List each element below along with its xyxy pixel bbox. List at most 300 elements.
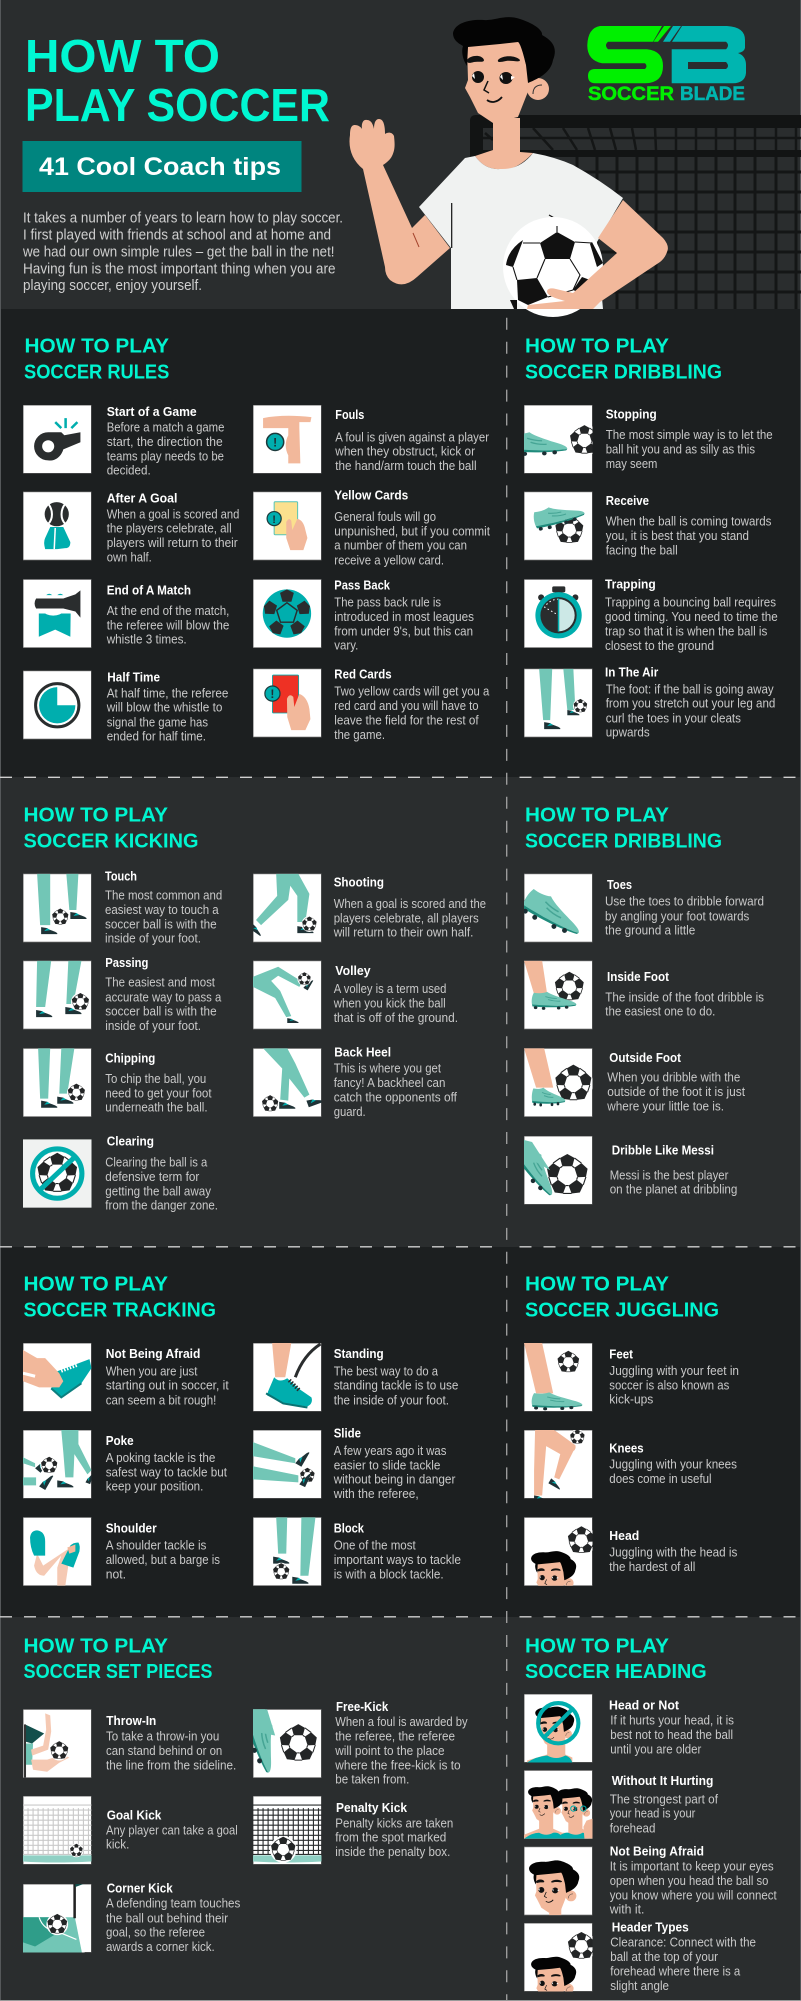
description	[606, 1070, 745, 1113]
description: whistle 3 times.	[106, 633, 187, 647]
title: Pass Back	[334, 578, 390, 592]
title: Header Types	[612, 1921, 689, 1935]
title: Inside Foot	[607, 970, 670, 984]
description: your head is your	[610, 1807, 695, 1821]
description: the hardest of all	[609, 1560, 695, 1574]
icon: volley legs	[253, 960, 322, 1030]
tip: free-kick	[238, 1700, 468, 1787]
tip: head or not	[524, 1694, 734, 1762]
title: Throw-In	[106, 1714, 156, 1728]
icon: goal net light	[23, 1796, 92, 1864]
intro text: playing soccer, enjoy yourself.	[23, 277, 202, 294]
description: inside of your foot.	[105, 932, 201, 946]
logo: soccer blade: SOCCER	[588, 84, 674, 105]
icon: boot and ball	[524, 405, 592, 474]
icon: ball and pennant	[23, 492, 92, 560]
description: is with a block tackle.	[334, 1568, 444, 1582]
intro text: It takes a number of years to learn how to play soccer.	[23, 210, 343, 227]
badge: 41 cool coach tips: 41 Cool Coach tips	[39, 153, 281, 181]
title: Poke	[106, 1434, 134, 1448]
description: The most common and	[105, 889, 222, 903]
icon: chipping legs	[23, 1048, 92, 1117]
description: A few years ago it was	[334, 1444, 446, 1458]
description	[106, 1539, 220, 1582]
icon: legs with small ball	[524, 668, 592, 738]
tip: yellow cards	[253, 488, 490, 567]
tip: block	[253, 1517, 461, 1586]
description: vary.	[334, 639, 358, 653]
icon: outside foot	[524, 1048, 592, 1117]
description: the players celebrate, all	[107, 522, 232, 536]
description: curl the toes in your cleats	[606, 711, 741, 725]
description: The easiest and most	[105, 976, 215, 990]
description: will point to the place	[334, 1744, 445, 1758]
description	[106, 1897, 240, 1954]
description: defensive term for	[105, 1170, 199, 1184]
description: goal, so the referee	[106, 1926, 205, 1940]
intro text	[22, 210, 343, 294]
description: trap so that it is when the ball is	[605, 624, 767, 638]
description: outside of the foot it is just	[607, 1085, 745, 1099]
description: until you are older	[610, 1742, 701, 1756]
tip: volley	[253, 961, 458, 1029]
description: introduced in most leagues	[334, 610, 474, 624]
description: underneath the ball.	[105, 1101, 208, 1115]
description: decided.	[107, 464, 151, 478]
tip: red cards	[253, 667, 489, 742]
icon: two heads	[524, 1770, 592, 1839]
description	[606, 682, 775, 740]
description: facing the ball	[606, 543, 678, 557]
description: Messi is the best player	[610, 1168, 728, 1182]
icon: shoulder arm	[23, 1517, 92, 1586]
tip: penalty kick	[253, 1796, 453, 1865]
description: easier to slide tackle	[334, 1458, 440, 1472]
description: the hand/arm touch the ball	[335, 459, 477, 473]
description: slight angle	[610, 1979, 669, 1993]
description	[106, 1364, 229, 1407]
heading: soccer set pieces: HOW TO PLAY	[24, 1635, 169, 1657]
description: can stand behind or on	[106, 1744, 222, 1758]
title: Penalty Kick	[336, 1801, 407, 1815]
description: A poking tackle is the	[106, 1451, 215, 1465]
icon: yellow card	[253, 492, 322, 560]
heading: soccer juggling: HOW TO PLAY	[525, 1274, 670, 1296]
icon: red card	[253, 668, 322, 738]
description	[605, 895, 764, 938]
description	[609, 1546, 737, 1574]
description: players celebrate, all players	[334, 911, 479, 925]
soccer ball	[503, 217, 603, 317]
icon: red card: !	[270, 687, 274, 701]
title: Not Being Afraid	[610, 1845, 704, 1859]
description: with the referee,	[333, 1487, 419, 1501]
description: receive a yellow card.	[334, 553, 444, 567]
icon: hand on shoe	[23, 1343, 92, 1412]
description	[333, 1444, 455, 1501]
tip: fouls	[253, 405, 489, 474]
heading: soccer rules: HOW TO PLAY	[24, 336, 170, 358]
description: Juggling with the head is	[609, 1546, 737, 1560]
logo: soccer blade	[587, 26, 746, 105]
title: Free-Kick	[336, 1700, 388, 1714]
title: Clearing	[107, 1135, 154, 1149]
title: Half Time	[107, 670, 160, 684]
description	[610, 1168, 737, 1197]
description: A shoulder tackle is	[106, 1539, 206, 1553]
description: Any player can take a goal	[106, 1823, 238, 1837]
description: own half.	[107, 550, 152, 564]
title: Shoulder	[106, 1522, 157, 1536]
description: forehead where there is a	[610, 1965, 740, 1979]
description: red card and you will have to	[334, 699, 479, 713]
description	[334, 596, 474, 653]
description	[334, 1715, 468, 1787]
description	[609, 1860, 777, 1917]
hero header	[22, 17, 801, 317]
description: Two yellow cards will get you a	[334, 685, 489, 699]
description: Juggling with your feet in	[609, 1364, 739, 1378]
description	[333, 897, 486, 940]
section: soccer heading	[524, 1635, 777, 2001]
section: soccer rules	[23, 336, 490, 744]
description: important ways to tackle	[334, 1553, 461, 1567]
description: allowed, but a barge is	[106, 1553, 220, 1567]
description: The pass back rule is	[334, 596, 441, 610]
description: Before a match a game	[107, 421, 224, 435]
description: best not to head the ball	[610, 1728, 733, 1742]
description	[334, 685, 489, 742]
description: you, it is best that you stand	[606, 529, 749, 543]
description: open when you head the ball so	[610, 1874, 768, 1888]
tip: without it hurting	[524, 1770, 718, 1839]
description: from under 9's, but this can	[334, 624, 473, 638]
heading: soccer heading	[525, 1635, 707, 1683]
description: easiest way to touch a	[105, 903, 219, 917]
tip: start of a game	[23, 405, 224, 478]
heading: soccer kicking: HOW TO PLAY	[24, 804, 169, 826]
title: HOW TO	[25, 30, 220, 82]
heading: soccer set pieces	[24, 1635, 212, 1683]
title: Block	[334, 1522, 364, 1536]
description: will return to their own half.	[333, 926, 473, 940]
icon: back heel legs	[253, 1048, 322, 1117]
description: A volley is a term used	[334, 982, 446, 996]
icon: boot on ball	[524, 1136, 592, 1204]
description: accurate way to pass a	[105, 990, 221, 1004]
description	[334, 1539, 461, 1582]
description	[334, 430, 489, 473]
icon: no-ball sign	[23, 1139, 92, 1208]
tip: shoulder	[23, 1517, 220, 1586]
tip: dribble like messi	[509, 1136, 737, 1204]
description: It is important to keep your eyes	[610, 1860, 774, 1874]
tip: poke	[23, 1430, 227, 1498]
tip: throw-in	[23, 1709, 236, 1778]
description: When a goal is scored and	[107, 507, 239, 521]
icon: teal ball	[253, 579, 322, 648]
description	[106, 1730, 236, 1772]
description	[105, 1072, 212, 1115]
description	[106, 1451, 227, 1494]
description: on the planet at dribbling	[610, 1183, 737, 1197]
tip: slide	[253, 1427, 455, 1501]
tip: shooting	[250, 874, 486, 942]
description	[335, 1816, 453, 1859]
description: soccer ball is with the	[105, 917, 217, 931]
player illustration	[350, 17, 668, 317]
tip: in the air	[524, 666, 775, 740]
description	[105, 889, 222, 946]
description: Juggling with your knees	[609, 1458, 737, 1472]
description: unpunished, but if you commit	[334, 524, 490, 538]
description: good timing. You need to time the	[605, 610, 778, 624]
description: not.	[106, 1568, 126, 1582]
tip: clearing	[23, 1135, 218, 1213]
description: Penalty kicks are taken	[335, 1816, 453, 1830]
description: without being in danger	[333, 1473, 455, 1487]
title: PLAY SOCCER	[25, 79, 330, 131]
description: the inside of your foot.	[334, 1393, 449, 1407]
description: from the danger zone.	[105, 1199, 218, 1213]
tip: trapping	[524, 577, 778, 653]
description: fancy! A backheel can	[334, 1076, 445, 1090]
description: closest to the ground	[605, 639, 714, 653]
description: when they obstruct, kick or	[334, 445, 475, 459]
description: can seem a bit rough!	[106, 1393, 216, 1407]
section: soccer set pieces	[23, 1635, 468, 1954]
title: Touch	[105, 870, 137, 884]
title: Goal Kick	[107, 1808, 161, 1822]
description: This is where you get	[334, 1062, 441, 1076]
description: the easiest one to do.	[605, 1005, 715, 1019]
description: the referee, the referee	[335, 1730, 455, 1744]
description: kick.	[106, 1838, 129, 1852]
tip: standing	[253, 1343, 458, 1412]
title: Red Cards	[334, 667, 392, 681]
icon: boot and big ball	[253, 1709, 322, 1778]
tip: not being afraid heading	[524, 1845, 777, 1917]
description: A foul is given against a player	[335, 430, 489, 444]
title: Outside Foot	[609, 1051, 682, 1065]
title: Corner Kick	[107, 1882, 173, 1896]
tip: head	[524, 1517, 737, 1598]
heading: soccer set pieces: SOCCER SET PIECES	[24, 1661, 212, 1683]
description: the game.	[334, 728, 385, 742]
description: a number of them you can	[334, 539, 467, 553]
title: Start of a Game	[107, 405, 197, 419]
tip: toes	[519, 874, 764, 942]
description: General fouls will go	[334, 510, 436, 524]
description: where your little toe is.	[606, 1099, 724, 1113]
title: Shooting	[334, 876, 384, 890]
description	[105, 1156, 218, 1213]
description: catch the opponents off	[334, 1091, 457, 1105]
title: Head or Not	[609, 1698, 680, 1712]
icon: poke tackle	[23, 1430, 92, 1498]
icon: goal net dark	[253, 1796, 322, 1864]
description: When you dribble with the	[607, 1070, 740, 1084]
title: Standing	[334, 1347, 384, 1361]
title	[25, 30, 330, 131]
description: The inside of the foot dribble is	[605, 990, 764, 1004]
tip: passing	[23, 956, 221, 1033]
goal net	[470, 115, 801, 309]
icon: yellow card: !	[272, 514, 276, 526]
heading: soccer heading: SOCCER HEADING	[525, 1661, 707, 1683]
description: start, the direction the	[107, 435, 223, 449]
description: Use the toes to dribble forward	[605, 895, 764, 909]
intro text: I first played with friends at school and at home and	[23, 226, 331, 244]
description: The best way to do a	[334, 1364, 438, 1378]
description	[105, 976, 221, 1033]
heading: soccer rules	[24, 336, 170, 383]
description: starting out in soccer, it	[106, 1379, 229, 1393]
description	[610, 1936, 756, 1993]
tip: outside foot	[524, 1048, 745, 1117]
heading: soccer rules: SOCCER RULES	[24, 361, 169, 383]
description: may seem	[606, 457, 657, 471]
icon: referee hand signal: !	[273, 435, 277, 449]
title: Feet	[609, 1348, 634, 1362]
title: Dribble Like Messi	[612, 1143, 714, 1157]
description: To chip the ball, you	[105, 1072, 206, 1086]
tip: end of a match	[23, 579, 229, 648]
tip: header types	[524, 1921, 756, 2001]
tip: pass back	[253, 578, 474, 653]
section: soccer dribbling techniques	[509, 804, 764, 1204]
heading: soccer heading: HOW TO PLAY	[525, 1635, 670, 1657]
heading: soccer tracking	[24, 1274, 216, 1322]
title: Head	[609, 1529, 639, 1543]
description: inside of your foot.	[105, 1019, 201, 1033]
icon: whistle	[23, 405, 92, 474]
description: When you are just	[106, 1364, 198, 1378]
description	[334, 1062, 457, 1119]
tip: knees	[524, 1429, 737, 1501]
heading: soccer dribbling: SOCCER DRIBBLING	[525, 830, 722, 852]
description: getting the ball away	[105, 1184, 212, 1198]
heading: soccer dribbling: HOW TO PLAY	[525, 336, 670, 358]
tip: after a goal	[23, 491, 239, 564]
heading: soccer dribbling: SOCCER DRIBBLING	[525, 361, 722, 383]
description	[605, 596, 778, 653]
title: Fouls	[335, 408, 364, 422]
description: inside the penalty box.	[335, 1845, 450, 1859]
title: Receive	[606, 494, 649, 508]
description: If it hurts your head, it is	[610, 1714, 734, 1728]
title: In The Air	[605, 666, 658, 680]
section: soccer tracking	[23, 1274, 461, 1586]
description: players will return to their	[107, 536, 238, 550]
title: Yellow Cards	[334, 488, 408, 502]
description	[334, 1364, 458, 1407]
tip: goal kick	[23, 1796, 238, 1864]
description: does come in useful	[609, 1472, 712, 1486]
description: with it.	[609, 1903, 644, 1917]
description: safest way to tackle but	[106, 1465, 227, 1479]
description: A defending team touches	[106, 1897, 240, 1911]
description: guard.	[334, 1105, 366, 1119]
description: from the spot marked	[335, 1831, 446, 1845]
title: Chipping	[105, 1052, 155, 1066]
description	[606, 428, 773, 471]
description: need to get your foot	[105, 1086, 212, 1100]
title: Volley	[335, 964, 371, 978]
description: you know where you will connect	[610, 1888, 777, 1902]
heading: soccer kicking: SOCCER KICKING	[24, 830, 198, 852]
tip: receive	[524, 492, 771, 560]
heading: soccer dribbling	[525, 336, 722, 383]
title: Without It Hurting	[612, 1774, 713, 1788]
description	[334, 510, 490, 567]
icon: angled boot	[524, 874, 592, 942]
tip: feet	[524, 1343, 739, 1412]
description: signal the game has	[107, 715, 208, 729]
description: the referee will blow the	[107, 618, 229, 632]
icon: inside foot	[524, 960, 592, 1030]
icon: boot over ball	[524, 492, 592, 560]
icon: half-time clock	[23, 670, 92, 740]
icon: touch legs	[23, 874, 92, 942]
icon: knee and ball	[524, 1430, 592, 1498]
description: teams play needs to be	[107, 449, 224, 463]
description	[333, 982, 458, 1025]
description: The most simple way is to let the	[606, 428, 773, 442]
icon: head and ball	[524, 1923, 598, 2001]
icon: throw-in	[23, 1709, 92, 1778]
tip: stopping	[509, 405, 773, 474]
description: keep your position.	[106, 1480, 203, 1494]
description: When a goal is scored and the	[334, 897, 486, 911]
description	[106, 604, 229, 647]
tip: corner kick	[23, 1882, 240, 1954]
heading: soccer dribbling	[525, 804, 722, 852]
description: ball hit you and as silly as this	[606, 442, 755, 456]
title: Not Being Afraid	[106, 1347, 200, 1361]
description	[605, 990, 764, 1019]
heading: soccer kicking	[24, 804, 198, 852]
title: Back Heel	[334, 1046, 391, 1060]
logo: soccer blade: BLADE	[680, 84, 745, 105]
tip: inside foot	[524, 961, 764, 1029]
tip: touch	[23, 870, 222, 946]
description: where the free-kick is to	[334, 1758, 461, 1772]
description: At half time, the referee	[107, 686, 228, 700]
description: soccer is also known as	[609, 1378, 729, 1392]
description: When the ball is coming towards	[606, 514, 771, 528]
description: ended for half time.	[107, 730, 206, 744]
description: the line from the sideline.	[106, 1758, 236, 1772]
description: be taken from.	[335, 1773, 409, 1787]
description	[610, 1714, 734, 1756]
description: when you kick the ball	[333, 997, 446, 1011]
icon: horn	[23, 579, 92, 648]
description	[606, 514, 771, 557]
icon: foot and ball	[524, 1343, 592, 1412]
description	[609, 1458, 737, 1486]
description: When a foul is awarded by	[335, 1715, 468, 1729]
intro text: Having fun is the most important thing when you are	[23, 260, 336, 277]
tip: not being afraid	[23, 1343, 229, 1412]
description: by angling your foot towards	[605, 909, 749, 923]
title: Slide	[334, 1427, 361, 1441]
description	[107, 421, 224, 478]
description	[609, 1364, 739, 1407]
heading: soccer tracking: SOCCER TRACKING	[24, 1300, 216, 1322]
icon: referee hand signal	[253, 405, 322, 474]
section: soccer kicking	[23, 804, 486, 1213]
